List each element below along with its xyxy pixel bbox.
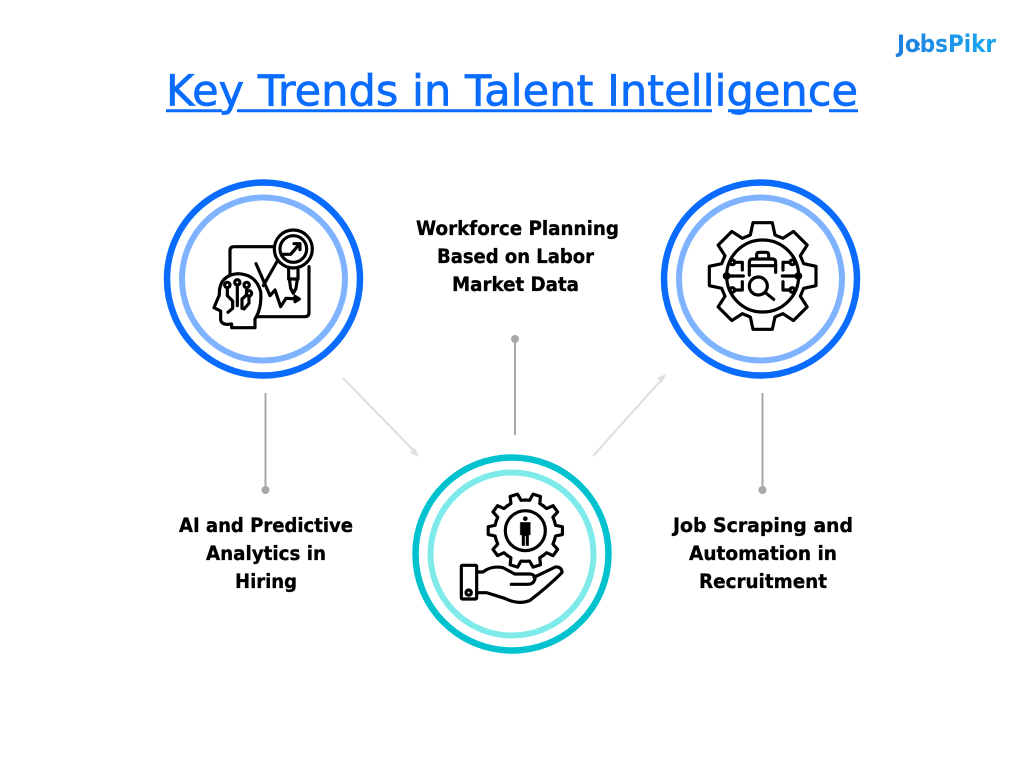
label: workforce planning: Workforce Planning xyxy=(416,217,619,240)
label: job scraping and automation: Automation in xyxy=(689,542,837,565)
label: job scraping and automation xyxy=(671,514,853,593)
connector: left label xyxy=(262,393,270,494)
title: Key Trends in Talent Intelligence xyxy=(166,66,858,116)
icon: hand holding gear with person xyxy=(461,492,562,602)
arrow: left circle to centre circle xyxy=(343,378,419,457)
logo: JobsPikr: JobsPikr xyxy=(895,30,996,58)
label: AI and predictive analytics: Analytics in xyxy=(206,542,326,565)
label: workforce planning: Market Data xyxy=(452,273,579,296)
connector: top label xyxy=(511,335,519,435)
circle: job scraping and automation xyxy=(664,182,857,376)
label: job scraping and automation: Job Scraping and xyxy=(671,514,853,537)
circle: AI and predictive analytics xyxy=(167,182,360,376)
arrow: centre circle to right circle xyxy=(593,374,666,456)
label: workforce planning xyxy=(416,217,619,296)
circle: workforce planning xyxy=(416,458,608,650)
icon: gear with briefcase and magnifier xyxy=(709,223,816,329)
label: AI and predictive analytics: AI and Predictive xyxy=(179,514,353,537)
connector: right label xyxy=(758,393,766,494)
label: AI and predictive analytics: Hiring xyxy=(235,570,297,593)
label: AI and predictive analytics xyxy=(179,514,353,593)
label: job scraping and automation: Recruitment xyxy=(699,570,827,593)
label: workforce planning: Based on Labor xyxy=(437,245,594,268)
icon: head, chart and gauge xyxy=(214,230,312,328)
